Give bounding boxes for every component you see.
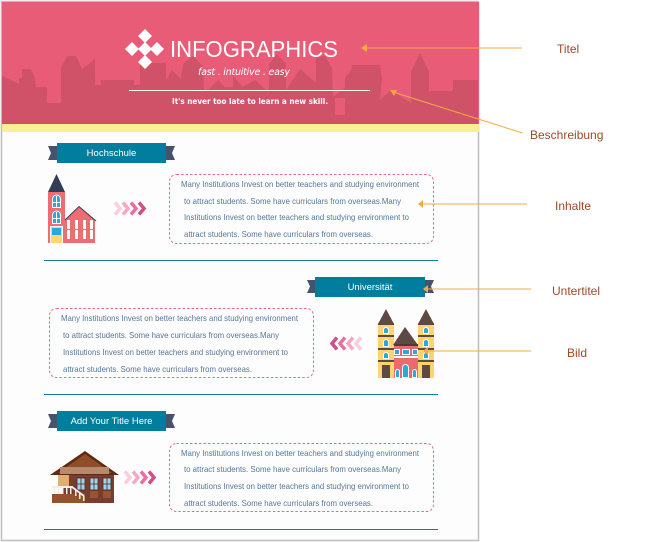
text box 1: [170, 174, 434, 244]
text box 1: Many Institutions Invest on better teachers and studying environment: [181, 179, 420, 189]
banner: Hochschule: Hochschule: [87, 148, 136, 159]
annotation: Untertitel: Untertitel: [552, 284, 600, 298]
text box 3: to attract students. Some have curriculars from overseas.Many: [184, 464, 402, 474]
banner: Add Your Title Here: [48, 411, 175, 431]
divider: [44, 394, 438, 395]
divider: [44, 529, 438, 530]
header panel: [2, 2, 479, 132]
text box 2: Many Institutions Invest on better teachers and studying environment: [61, 313, 299, 323]
annotation: Inhalte: [418, 199, 591, 213]
text box 1: attract students. Some have curriculars from overseas.: [184, 229, 373, 239]
header rule: [129, 90, 370, 91]
annotation: Beschreibung: [390, 90, 603, 142]
banner: Add Your Title Here: Add Your Title Here: [71, 416, 152, 427]
banner: Universität: [307, 277, 434, 297]
section 2: Universität: [50, 277, 434, 378]
icon: church: [48, 174, 96, 243]
yellow band: [2, 124, 479, 132]
icon: house: [50, 451, 119, 503]
skyline window: [335, 98, 345, 115]
arrow: chevrons left: [332, 338, 361, 350]
section 3: Add Your Title Here: [48, 411, 434, 512]
icon: university: [378, 309, 434, 378]
annotation: Titel: [361, 42, 579, 56]
annotation: Beschreibung: Beschreibung: [530, 128, 603, 142]
annotation: Untertitel: [423, 284, 600, 298]
banner: Universität: Universität: [348, 282, 393, 293]
text box 2: to attract students. Some have curriculars from overseas.Many: [63, 330, 280, 340]
arrow: chevrons right: [125, 472, 154, 484]
arrow: chevrons right: [115, 202, 144, 214]
annotation: Titel: Titel: [557, 42, 579, 56]
banner: Hochschule: [48, 143, 175, 163]
annotation: Bild: [423, 346, 587, 360]
logo diamonds: [125, 29, 164, 69]
text box 3: Many Institutions Invest on better teachers and studying environment: [181, 448, 420, 458]
city skyline: [2, 53, 478, 124]
tagline: fast . intuitive . easy: [198, 67, 290, 78]
section 1: Hochschule: [48, 143, 434, 244]
text box 1: Institutions Invest on better teachers and studying environment to: [184, 212, 409, 222]
text box 3: [170, 444, 434, 512]
text box 2: attract students. Some have curriculars from overseas.: [63, 364, 252, 374]
title: INFOGRAPHICS: [170, 36, 338, 62]
text box 2: [50, 308, 314, 378]
page frame: [2, 2, 478, 540]
divider: [44, 260, 438, 261]
subtitle: It's never too late to learn a new skill.: [172, 97, 328, 106]
text box 3: attract students. Some have curriculars from overseas.: [184, 498, 373, 508]
annotation: Bild: Bild: [567, 346, 587, 360]
text box 1: to attract students. Some have curriculars from overseas.Many: [184, 196, 402, 206]
annotation: Inhalte: Inhalte: [555, 199, 591, 213]
text box 3: Institutions Invest on better teachers and studying environment to: [184, 481, 409, 491]
text box 2: Institutions Invest on better teachers and studying environment to: [63, 347, 288, 357]
